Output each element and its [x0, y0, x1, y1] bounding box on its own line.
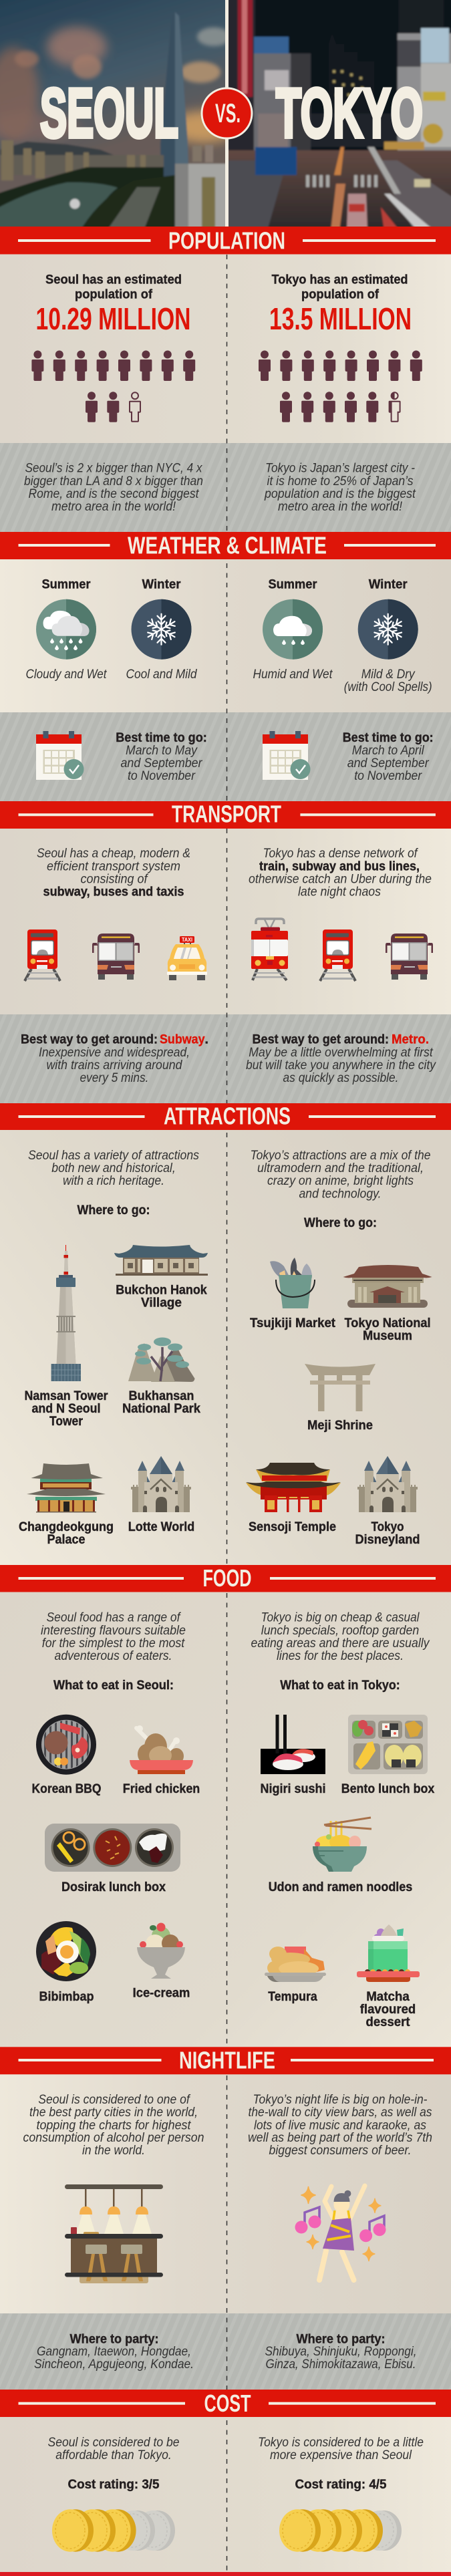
Changdeokgung Palace: Changdeokgung: [19, 1520, 114, 1534]
Udon and ramen noodles: Udon and ramen noodles: [269, 1880, 412, 1894]
text: Tokyo population: population of: [301, 287, 379, 302]
text: Tokyo where to party: Shibuya, Shinjuku, Roppongi,: [265, 2344, 417, 2359]
icon row: Seoul people: [31, 350, 195, 422]
text: Tokyo best time: March to April: [352, 743, 424, 758]
text: Seoul where to party: Gangnam, Itaewon, Hongdae,: [37, 2344, 191, 2359]
icon: rain cloud: [263, 599, 323, 660]
heading: transport: [0, 801, 451, 829]
text: Seoul best time: and September: [120, 756, 203, 770]
text: Seoul fact: Seoul’s is 2 x bigger than NYC, 4 x: [25, 461, 203, 476]
text: Tokyo food: Tokyo is big on cheap & casual: [261, 1610, 420, 1625]
text: Seoul best way: Best way to get around:: [21, 1032, 158, 1047]
vs badge: [202, 88, 252, 138]
icon: train: [320, 929, 355, 981]
icon: fish bucket: [270, 1258, 315, 1308]
Seoul summer: [25, 577, 108, 682]
heading: nightlife: NIGHTLIFE: [179, 2046, 275, 2073]
text: Tokyo fact: it is home to 25% of Japan’s: [267, 474, 414, 488]
icon: grill: [36, 1715, 96, 1775]
icon: train: [25, 929, 60, 981]
icon row: Tokyo people: [259, 350, 422, 422]
footer band: [0, 2572, 451, 2576]
Matcha flavoured dessert: flavoured: [360, 2002, 416, 2017]
Dosirak lunch box: [45, 1824, 180, 1894]
Seoul summer: Summer: [41, 577, 91, 592]
text: Seoul attractions: with a rich heritage.: [63, 1173, 164, 1188]
Namsan Tower: [24, 1245, 108, 1429]
Tempura: [265, 1947, 326, 2004]
panel: transport: [0, 828, 451, 1103]
Seoul winter: Winter: [142, 577, 181, 592]
text: Tokyo attractions: and technology.: [299, 1187, 381, 1201]
Bibimbap: [36, 1921, 96, 2004]
icon: sushi: [261, 1715, 325, 1774]
icon: bar: [65, 2184, 163, 2283]
text: Tokyo nightlife: lots of live music and karaoke, as: [254, 2118, 426, 2133]
Meiji Shrine: Meji Shrine: [307, 1418, 373, 1433]
text: Seoul where to party: Where to party:: [69, 2332, 159, 2347]
text: Seoul nightlife: topping the charts for highest: [36, 2118, 192, 2133]
text: Seoul nightlife: in the world.: [82, 2143, 145, 2158]
text: Tokyo best way: May be a little overwhelming at first: [249, 1045, 434, 1060]
icon: mountain and tree: [128, 1338, 195, 1382]
text: Seoul population: 10.29 MILLION: [36, 301, 191, 336]
text: Seoul best time: [116, 730, 207, 783]
Udon and ramen noodles: [269, 1818, 412, 1894]
Tokyo Disneyland: Disneyland: [355, 1532, 420, 1547]
Lotte World: [128, 1456, 194, 1534]
text: Tokyo food: [251, 1610, 430, 1693]
icon: dosirak: [45, 1824, 180, 1872]
Matcha flavoured dessert: Matcha: [366, 1989, 410, 2004]
text: Tokyo attractions: Tokyo’s attractions are a mix of the: [250, 1148, 431, 1163]
panel: cost: [0, 2416, 451, 2573]
Tokyo winter: (with Cool Spells): [344, 680, 432, 694]
text: Seoul best way: Subway: [160, 1032, 205, 1047]
text: Tokyo transport: [249, 846, 432, 899]
text: Seoul best way: .: [204, 1032, 208, 1047]
Namsan Tower: Namsan Tower: [24, 1389, 108, 1403]
Tokyo winter: Mild & Dry: [361, 667, 416, 682]
panel: food: [0, 1591, 451, 2048]
text: Tokyo attractions: crazy on anime, bright lights: [267, 1173, 414, 1188]
text: Tokyo cost: Cost rating: 4/5: [295, 2477, 387, 2492]
icon: temple: [246, 1463, 341, 1512]
Fried chicken: [123, 1725, 200, 1796]
text: Tokyo nightlife: the-wall to city view bars, as well as: [249, 2105, 432, 2120]
icon: Seoul coins 3 of 5: [52, 2509, 175, 2552]
text: Seoul where to party: [34, 2332, 194, 2372]
icon: castle: [357, 1456, 418, 1512]
Sensoji Temple: Sensoji Temple: [249, 1520, 336, 1534]
header photo: Tokyo street: [220, 0, 451, 234]
icon: tram: [251, 919, 288, 980]
icon: torii gate: [305, 1364, 375, 1411]
icon: bibimbap: [36, 1921, 96, 1981]
Tokyo summer: Humid and Wet: [253, 667, 333, 682]
icon: matcha dessert: [357, 1924, 420, 1982]
text: Tokyo where to party: Where to party:: [297, 2332, 385, 2347]
text: Tokyo food: eating areas and there are usually: [251, 1636, 430, 1651]
icon: castle: [131, 1456, 191, 1512]
icon: hanok: [114, 1245, 208, 1276]
Dosirak lunch box: Dosirak lunch box: [61, 1880, 166, 1894]
text: Tokyo fact: population and is the biggest: [264, 486, 416, 501]
icon: snowflake: [358, 599, 418, 660]
Seoul summer: Cloudy and Wet: [25, 667, 108, 682]
header photo: Seoul skyline: [0, 0, 237, 234]
heading: transport: TRANSPORT: [172, 801, 281, 828]
text: Seoul best way: [21, 1032, 208, 1085]
text: Tokyo cost: more expensive than Seoul: [270, 2448, 412, 2462]
text: Tokyo transport: otherwise catch an Uber during the: [249, 872, 432, 887]
Korean BBQ: [32, 1715, 102, 1796]
text: Seoul fact: metro area in the world!: [51, 499, 176, 514]
Namsan Tower: Tower: [49, 1414, 83, 1429]
panel: population: [0, 254, 451, 532]
text: Seoul attractions: Where to go:: [78, 1203, 150, 1218]
Sensoji Temple: [246, 1463, 341, 1534]
text: Tokyo food: What to eat in Tokyo:: [280, 1678, 400, 1693]
icon: taxi: [167, 936, 207, 980]
panel: weather and climate: [0, 559, 451, 801]
icon: Seoul calendar: [36, 731, 84, 780]
Tokyo National Museum: Tokyo National: [345, 1316, 430, 1330]
text: Seoul best time: to November: [128, 768, 196, 783]
Lotte World: Lotte World: [128, 1520, 194, 1534]
icon: noodle bowl: [313, 1818, 371, 1872]
text: Tokyo best time: [343, 730, 434, 783]
text: Seoul nightlife: Seoul is considered to one of: [38, 2092, 191, 2107]
text: Tokyo transport: Tokyo has a dense network of: [263, 846, 419, 861]
Bukchon Hanok Village: Bukchon Hanok: [116, 1283, 207, 1298]
Nigiri sushi: [261, 1715, 326, 1796]
text: Tokyo attractions: Where to go:: [304, 1215, 377, 1230]
text: Tokyo best way: as quickly as possible.: [283, 1070, 398, 1085]
text: Seoul fact: Rome, and is the second biggest: [28, 486, 200, 501]
heading: population: [0, 227, 451, 254]
Seoul winter: Cool and Mild: [126, 667, 198, 682]
text: Seoul population: [36, 273, 191, 336]
Bukhansan National Park: National Park: [122, 1401, 200, 1416]
icon: ice cream: [137, 1923, 185, 1979]
text: Seoul where to party: Sincheon, Apgujeong, Kondae.: [34, 2357, 194, 2372]
text: Seoul cost: Seoul is considered to be: [48, 2435, 180, 2450]
Ice-cream: Ice-cream: [133, 1986, 190, 2001]
panel: nightlife: [0, 2073, 451, 2390]
Tsukiji Market: Tsujkiji Market: [250, 1316, 335, 1330]
Seoul winter: [126, 577, 198, 682]
heading: weather and climate: WEATHER & CLIMATE: [128, 532, 327, 559]
text: Seoul fact: bigger than LA and 8 x bigger than: [24, 474, 203, 488]
icon: museum: [343, 1265, 432, 1308]
text: Tokyo nightlife: Tokyo’s night life is big on hole-in-: [253, 2092, 428, 2107]
Bento lunch box: Bento lunch box: [341, 1781, 434, 1796]
text: Tokyo nightlife: biggest consumers of beer.: [269, 2143, 412, 2158]
text: Tokyo cost: [258, 2435, 424, 2492]
text: Seoul attractions: [28, 1148, 199, 1218]
Changdeokgung Palace: [19, 1463, 114, 1547]
Bukchon Hanok Village: [114, 1245, 208, 1310]
text: Seoul population: population of: [75, 287, 152, 302]
Tokyo National Museum: [343, 1265, 432, 1343]
text: Seoul best way: every 5 mins.: [80, 1070, 148, 1085]
Nigiri sushi: Nigiri sushi: [261, 1781, 326, 1796]
icon: tower: [51, 1245, 81, 1381]
heading: attractions: ATTRACTIONS: [164, 1103, 291, 1130]
text: Tokyo best time: to November: [354, 768, 423, 783]
text: Seoul transport: Seoul has a cheap, modern &: [37, 846, 190, 861]
text: Seoul food: adventerous of eaters.: [55, 1649, 172, 1663]
Bukhansan National Park: [122, 1338, 200, 1416]
text: Tokyo attractions: [250, 1148, 431, 1230]
vs badge: VS.: [215, 99, 241, 128]
text: Seoul best time: March to May: [126, 743, 198, 758]
text: Seoul population: Seoul has an estimated: [45, 273, 182, 287]
Tokyo Disneyland: [355, 1456, 420, 1547]
text: Tokyo attractions: ultramodern and the traditional,: [257, 1161, 424, 1175]
heading: population: POPULATION: [168, 227, 285, 254]
text: Seoul nightlife: consumption of alcohol per person: [23, 2130, 204, 2145]
text: Tokyo population: Tokyo has an estimated: [271, 273, 408, 287]
icon: Tokyo coins 4 of 5: [279, 2509, 402, 2552]
icon: snowflake: [131, 599, 191, 660]
Tokyo winter: Winter: [369, 577, 408, 592]
Meiji Shrine: [305, 1364, 375, 1433]
text: Seoul nightlife: the best party cities in the world,: [29, 2105, 198, 2120]
text: Seoul fact: [24, 461, 203, 514]
icon: rain cloud: [36, 599, 96, 660]
Tsukiji Market: [250, 1258, 335, 1330]
text: Seoul attractions: Seoul has a variety of attractions: [28, 1148, 199, 1163]
Bukchon Hanok Village: Village: [141, 1296, 182, 1310]
text: Seoul cost: Cost rating: 3/5: [68, 2477, 160, 2492]
text: Seoul best time: Best time to go:: [116, 730, 207, 745]
icon: bus: [386, 934, 433, 980]
text: Seoul nightlife: [23, 2092, 204, 2158]
text: Tokyo nightlife: [248, 2092, 432, 2158]
text: Tokyo best way: [246, 1032, 436, 1085]
panel: attractions: [0, 1130, 451, 1566]
heading: attractions: [0, 1103, 451, 1130]
Matcha flavoured dessert: dessert: [366, 2015, 410, 2029]
Namsan Tower: and N Seoul: [32, 1401, 100, 1416]
heading: nightlife: [0, 2046, 451, 2074]
text: Tokyo food: lunch specials, rooftop garden: [261, 1623, 419, 1638]
text: Seoul best way: Inexpensive and widespread,: [39, 1045, 190, 1060]
text: Seoul transport: consisting of: [80, 872, 149, 887]
text: Tokyo transport: train, subway and bus lines,: [259, 859, 420, 874]
text: Tokyo best time: Best time to go:: [343, 730, 434, 745]
heading: food: [0, 1564, 451, 1592]
text: Tokyo best time: and September: [347, 756, 430, 770]
text: Seoul cost: affordable than Tokyo.: [55, 2448, 172, 2462]
Matcha flavoured dessert: [357, 1924, 420, 2029]
Tokyo summer: [253, 577, 333, 682]
Korean BBQ: Korean BBQ: [32, 1781, 102, 1796]
text: Seoul transport: [37, 846, 190, 899]
text: Tokyo cost: Tokyo is considered to be a little: [258, 2435, 424, 2450]
icon: fried chicken: [130, 1725, 193, 1774]
icon: dancer: [295, 2186, 386, 2280]
text: Seoul best way: with trains arriving around: [47, 1058, 183, 1072]
Ice-cream: [133, 1923, 190, 2001]
text: Seoul food: [41, 1610, 186, 1693]
text: Tokyo fact: metro area in the world!: [278, 499, 403, 514]
heading: cost: COST: [204, 2390, 251, 2417]
Tokyo National Museum: Museum: [363, 1328, 412, 1343]
text: Tokyo fact: [264, 461, 416, 514]
text: Seoul transport: subway, buses and taxis: [43, 885, 184, 899]
text: Seoul food: interesting flavours suitable: [41, 1623, 186, 1638]
icon: bus: [92, 934, 140, 980]
text: Seoul attractions: both new and historical,: [51, 1161, 176, 1175]
text: Tokyo population: [269, 273, 412, 336]
icon: Tokyo calendar: [263, 731, 310, 780]
Tokyo Disneyland: Tokyo: [371, 1520, 404, 1534]
Bukhansan National Park: Bukhansan: [128, 1389, 194, 1403]
title: Seoul: SEOUL: [40, 75, 178, 152]
icon: palace: [27, 1463, 106, 1513]
text: Tokyo where to party: [265, 2332, 417, 2372]
header divider: [225, 0, 229, 227]
Tokyo summer: Summer: [269, 577, 317, 592]
text: Seoul food: What to eat in Seoul:: [53, 1678, 174, 1693]
text: Tokyo transport: late night chaos: [298, 885, 381, 899]
text: Tokyo fact: Tokyo is Japan’s largest city -: [265, 461, 415, 476]
heading: food: FOOD: [203, 1564, 251, 1592]
Tempura: Tempura: [268, 1989, 317, 2004]
text: Tokyo nightlife: well as being part of the world’s 7th: [248, 2130, 432, 2145]
heading: weather and climate: [0, 532, 451, 559]
icon: bento: [348, 1715, 428, 1774]
text: Seoul food: for the simplest to the most: [42, 1636, 186, 1651]
text: Seoul transport: efficient transport system: [47, 859, 180, 874]
Bibimbap: Bibimbap: [39, 1989, 94, 2004]
text: Tokyo best way: Metro.: [392, 1032, 429, 1047]
Bento lunch box: [341, 1715, 434, 1796]
heading: cost: [0, 2390, 451, 2417]
text: Tokyo food: lines for the best places.: [277, 1649, 404, 1663]
Tokyo winter: [344, 577, 432, 694]
text: Seoul food: Seoul food has a range of: [47, 1610, 182, 1625]
text: Seoul cost: [48, 2435, 180, 2492]
Fried chicken: Fried chicken: [123, 1781, 200, 1796]
text: Tokyo where to party: Ginza, Shimokitazawa, Ebisu.: [266, 2357, 416, 2372]
text: Tokyo best way: Best way to get around:: [253, 1032, 389, 1047]
icon: tempura: [265, 1947, 326, 1982]
icon: taxi: TAXI: [182, 937, 192, 943]
Changdeokgung Palace: Palace: [47, 1532, 86, 1547]
